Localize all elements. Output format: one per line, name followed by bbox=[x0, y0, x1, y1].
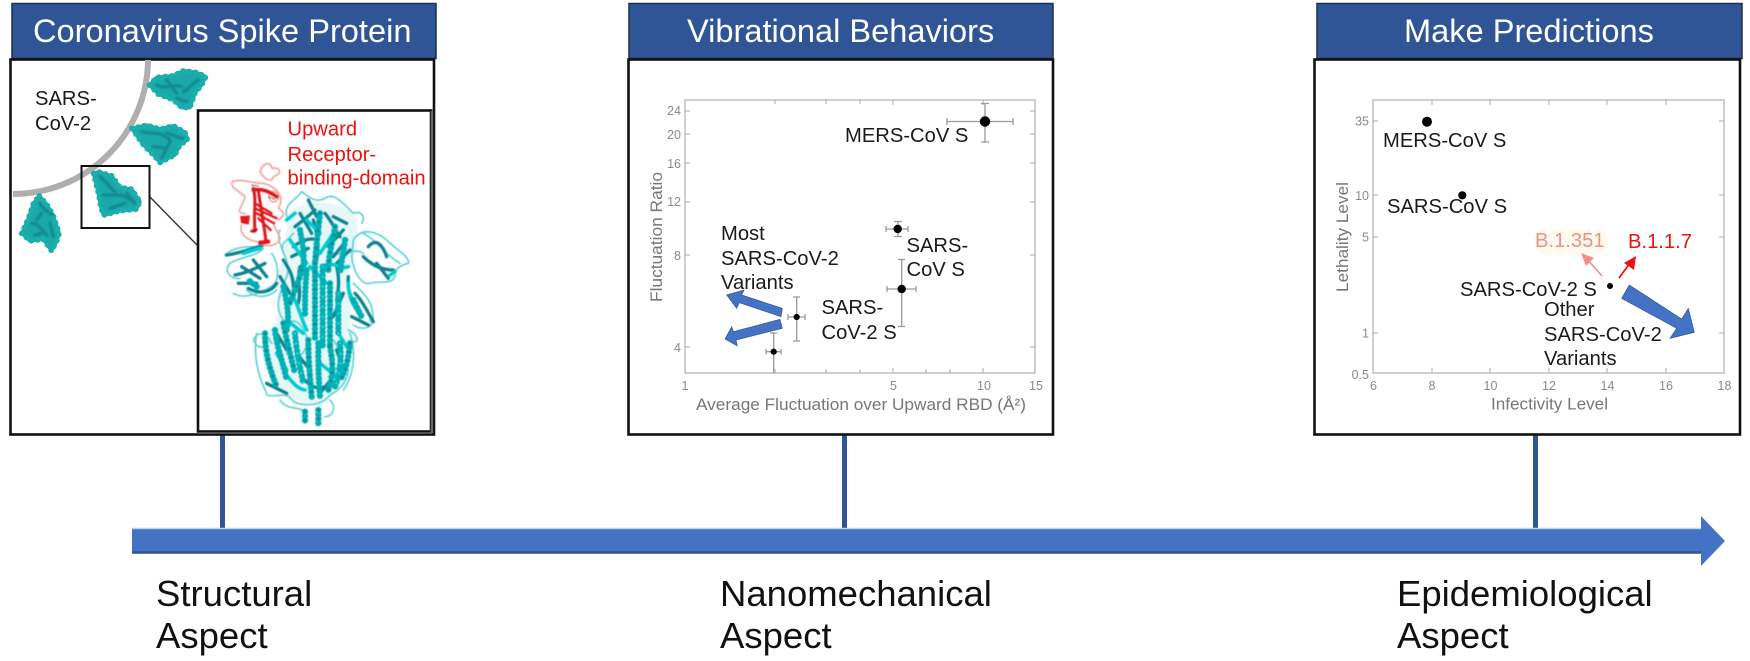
timeline stem: nanomechanical bbox=[842, 434, 847, 530]
y-axis tick labels: 8 bbox=[674, 249, 681, 263]
label: SARS-CoV S: CoV S bbox=[906, 259, 965, 281]
virus membrane arc bbox=[13, 60, 148, 194]
heading: Coronavirus Spike Protein: Coronavirus Spike Protein bbox=[33, 12, 411, 49]
label: SARS-CoV-2 S: CoV-2 S bbox=[822, 322, 897, 344]
timeline stem: epidemiological bbox=[1533, 434, 1538, 530]
arrow: variants lower bbox=[725, 319, 782, 346]
dark ribbons bbox=[227, 200, 393, 393]
y-axis tick labels bbox=[1352, 114, 1369, 382]
y-axis tick labels: 5 bbox=[1362, 230, 1369, 244]
label: SARS-CoV-2 S: SARS-CoV-2 S bbox=[1460, 279, 1597, 301]
label: SARS-CoV S: SARS- bbox=[906, 235, 968, 257]
icon: spike proteins on virus surface bbox=[22, 71, 206, 251]
y-axis tick labels: 35 bbox=[1355, 114, 1369, 128]
protein ribbon structure bbox=[225, 164, 408, 424]
heading: Make Predictions: Make Predictions bbox=[1404, 12, 1654, 49]
label: Other SARS-CoV-2 Variants: Other bbox=[1544, 299, 1594, 321]
data point: variant 1 bbox=[788, 297, 805, 341]
y-axis tick labels: 12 bbox=[667, 195, 681, 209]
x-axis tick labels: 18 bbox=[1718, 379, 1731, 393]
data point: SARS-CoV-2 S bbox=[1607, 283, 1613, 289]
x-axis tick labels bbox=[682, 379, 1043, 393]
arrow: variants upper bbox=[727, 290, 782, 317]
data point: variant 2 bbox=[766, 333, 781, 373]
timeline arrow bbox=[132, 516, 1725, 566]
arrow: toward B.1.351 bbox=[1581, 253, 1602, 276]
zoom leader line bbox=[150, 197, 197, 245]
label: SARS-CoV S: SARS-CoV S bbox=[1387, 196, 1507, 218]
label: SARS-CoV-2 S: SARS- bbox=[822, 297, 883, 319]
label: B.1.1.7: B.1.1.7 bbox=[1628, 231, 1692, 253]
data point: MERS-CoV S bbox=[947, 104, 1013, 142]
x-axis tick labels: 14 bbox=[1601, 379, 1614, 393]
x-axis title: Average Fluctuation over Upward RBD (Å²) bbox=[696, 395, 1026, 414]
label: SARS-CoV-2: SARS- bbox=[35, 88, 97, 110]
helices bbox=[248, 213, 362, 424]
receptor-binding-domain strands bbox=[241, 188, 277, 243]
y-axis tick labels bbox=[667, 104, 681, 355]
data point: MERS-CoV S bbox=[1422, 117, 1432, 127]
aspect label: structural: Structural bbox=[156, 573, 312, 614]
label: upward receptor-binding-domain: binding-domain bbox=[288, 168, 426, 190]
y-axis tick labels: 1 bbox=[1362, 326, 1369, 340]
heading: Vibrational Behaviors bbox=[629, 4, 1053, 58]
x-axis title: Infectivity Level bbox=[1491, 396, 1608, 414]
label: Most SARS-CoV-2 Variants: Most bbox=[721, 223, 765, 245]
label: B.1.351: B.1.351 bbox=[1535, 230, 1605, 252]
translucent body base bbox=[262, 203, 358, 405]
label: upward receptor-binding-domain: Receptor- bbox=[288, 144, 376, 166]
label: SARS-CoV-2: CoV-2 bbox=[35, 113, 91, 135]
panel: coronavirus spike protein bbox=[10, 60, 434, 434]
y-axis tick labels: 24 bbox=[667, 104, 681, 118]
y-axis tick labels: 20 bbox=[667, 128, 681, 142]
label: upward receptor-binding-domain: Upward bbox=[288, 118, 357, 140]
arrow: other variants bbox=[1622, 285, 1694, 338]
aspect label: epidemiological: Epidemiological bbox=[1397, 573, 1653, 614]
x-axis tick labels: 5 bbox=[890, 379, 897, 393]
receptor-binding-domain loops bbox=[232, 164, 283, 246]
scatter plot: fluctuation ratio vs average fluctuation bbox=[648, 100, 1043, 414]
aspect label: structural: Aspect bbox=[156, 615, 268, 656]
y-axis title: Fluctuation Ratio bbox=[648, 172, 666, 302]
label: Most SARS-CoV-2 Variants: SARS-CoV-2 bbox=[721, 248, 839, 270]
y-axis tick labels: 4 bbox=[674, 341, 681, 355]
y-axis title: Lethality Level bbox=[1334, 182, 1352, 292]
zoom selection box bbox=[82, 166, 150, 228]
x-axis tick labels: 10 bbox=[1484, 379, 1497, 393]
data point: SARS-CoV-2 S bbox=[887, 260, 916, 326]
x-axis tick labels: 16 bbox=[1659, 379, 1673, 393]
aspect label: nanomechanical: Aspect bbox=[720, 615, 832, 656]
label: MERS-CoV S: MERS-CoV S bbox=[845, 125, 968, 147]
inset: spike protein structure bbox=[198, 110, 432, 433]
panel: vibrational behaviors bbox=[628, 60, 1053, 434]
x-axis tick labels: 8 bbox=[1429, 379, 1436, 393]
x-axis tick labels: 1 bbox=[682, 379, 689, 393]
panel: make predictions bbox=[1314, 60, 1740, 434]
heading: Coronavirus Spike Protein bbox=[12, 4, 436, 58]
aspect label: epidemiological: Aspect bbox=[1397, 615, 1509, 656]
aspect label: nanomechanical: Nanomechanical bbox=[720, 573, 992, 614]
teal loops bbox=[225, 192, 408, 417]
timeline stem: structural bbox=[220, 434, 225, 530]
y-axis tick labels: 0.5 bbox=[1352, 368, 1369, 382]
bright ribbons bbox=[243, 213, 395, 390]
label: MERS-CoV S: MERS-CoV S bbox=[1383, 130, 1506, 152]
heading: Vibrational Behaviors: Vibrational Behaviors bbox=[687, 12, 994, 49]
x-axis tick labels: 12 bbox=[1542, 379, 1556, 393]
y-axis tick labels: 16 bbox=[667, 157, 681, 171]
data point: SARS-CoV S bbox=[1458, 191, 1466, 199]
y-axis tick labels: 10 bbox=[1355, 189, 1369, 203]
data point: SARS-CoV S bbox=[886, 222, 908, 236]
label: Other SARS-CoV-2 Variants: SARS-CoV-2 bbox=[1544, 324, 1662, 346]
label: Most SARS-CoV-2 Variants: Variants bbox=[721, 272, 794, 294]
heading: Make Predictions bbox=[1317, 4, 1742, 58]
x-axis tick labels: 15 bbox=[1029, 379, 1043, 393]
x-axis tick labels bbox=[1370, 379, 1731, 393]
x-axis tick labels: 6 bbox=[1370, 379, 1377, 393]
arrow: toward B.1.1.7 bbox=[1619, 256, 1636, 278]
x-axis tick labels: 10 bbox=[977, 379, 991, 393]
scatter plot: lethality vs infectivity bbox=[1334, 100, 1731, 414]
label: Other SARS-CoV-2 Variants: Variants bbox=[1544, 348, 1617, 370]
